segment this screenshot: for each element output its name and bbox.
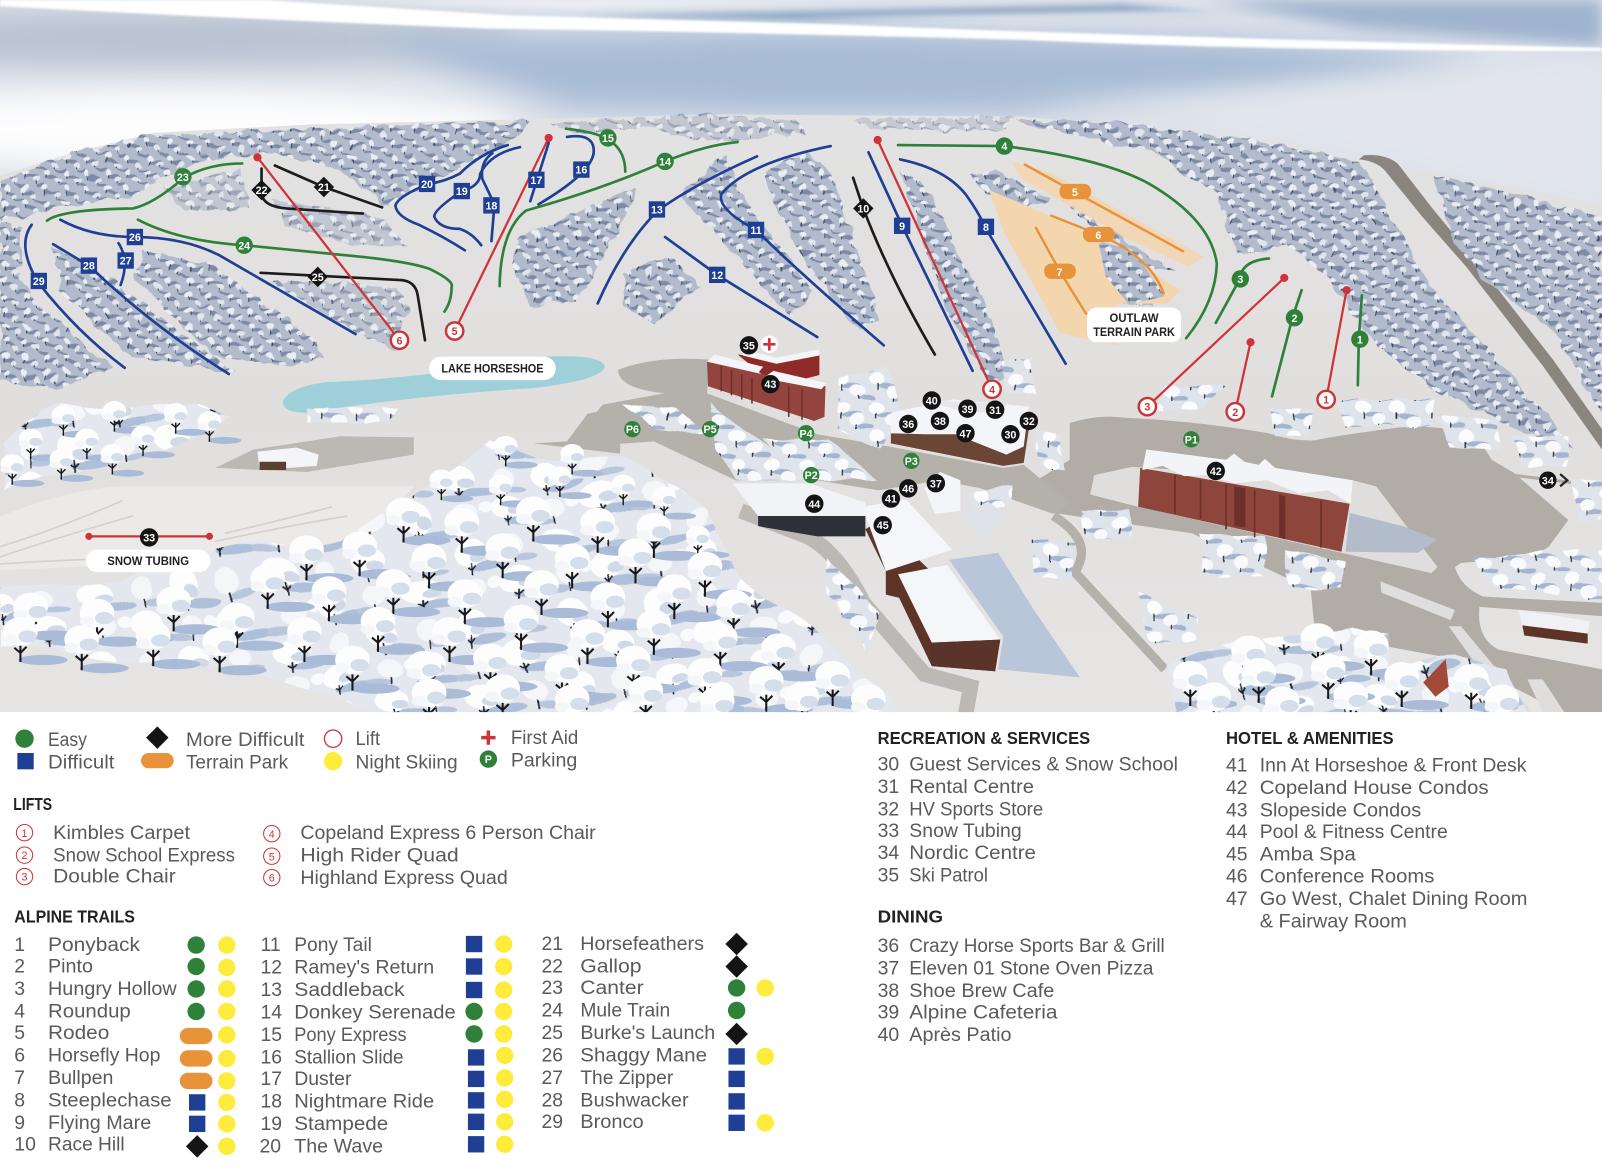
trails column 21 to 29: 22 xyxy=(541,956,563,978)
heading: lifts: LIFTS xyxy=(13,794,52,814)
trails column 21 to 29: 29 xyxy=(541,1111,563,1133)
panel: recreation and services xyxy=(878,728,1178,887)
facility markers: 35 xyxy=(743,340,755,352)
panel: difficulty key: Easy xyxy=(48,729,87,751)
building: Copeland House Condos xyxy=(1138,450,1353,552)
panel: difficulty key: First Aid xyxy=(511,727,578,749)
terrain trail 5 Rodeo: 5 xyxy=(1072,187,1078,199)
trail 27 The Zipper xyxy=(117,243,134,285)
trail 8 Steeplechase xyxy=(900,159,1066,364)
trail 21 Horsefeathers xyxy=(275,166,382,207)
trails column 21 to 29: 23 xyxy=(541,977,563,999)
trail 17 Duster xyxy=(528,143,549,201)
trail 14 Donkey Serenade: 14 xyxy=(659,157,671,169)
trails column 11 to 20: 11 xyxy=(261,934,281,956)
trails column 21 to 29: 26 xyxy=(541,1045,563,1067)
parking markers: P2 xyxy=(805,470,818,482)
trails column 1 to 10 xyxy=(14,934,235,1158)
trails column 21 to 29: 28 xyxy=(541,1089,563,1111)
parking markers: P1 xyxy=(1185,434,1198,446)
parking markers xyxy=(624,421,1199,483)
panel: hotel and amenities: & Fairway Room xyxy=(1260,911,1407,933)
facility markers: 41 xyxy=(885,494,897,506)
panel: lifts list: 1 xyxy=(22,828,28,840)
panel: lifts list: Highland Express Quad xyxy=(300,867,508,889)
lift 5 High Rider Quad xyxy=(446,134,553,340)
lift 4 Copeland Express xyxy=(874,136,1001,398)
label: Outlaw Terrain Park xyxy=(1087,308,1181,342)
trails column 11 to 20: 19 xyxy=(261,1113,282,1135)
panel: difficulty key: Lift xyxy=(356,728,381,750)
trails column 1 to 10: 5 xyxy=(14,1022,25,1044)
panel: lifts list: High Rider Quad xyxy=(300,844,459,866)
trail 9 Flying Mare: 9 xyxy=(899,221,905,233)
trail 17 Duster: 17 xyxy=(530,175,542,187)
trail 16 Stallion Slide xyxy=(538,136,594,204)
trails column 1 to 10: Pinto xyxy=(48,956,93,978)
lift 3 Double Chair: 3 xyxy=(1144,402,1150,414)
panel: dining: 37 xyxy=(878,958,899,980)
trail 13 Saddleback xyxy=(598,156,757,303)
trails column 21 to 29: Shaggy Mane xyxy=(580,1045,707,1067)
trails column 11 to 20: Pony Tail xyxy=(294,934,372,956)
facility markers: 31 xyxy=(989,405,1001,417)
trails column 1 to 10: Ponyback xyxy=(48,934,140,956)
trails column 1 to 10: 1 xyxy=(14,934,25,956)
panel: recreation and services: 35 xyxy=(878,865,899,887)
snow tubing marker and label: 33 xyxy=(143,532,155,544)
panel: lifts list: Snow School Express xyxy=(53,844,235,866)
panel: difficulty key: Parking xyxy=(511,749,577,771)
panel: dining: Shoe Brew Cafe xyxy=(909,980,1054,1002)
panel: lifts list: 2 xyxy=(22,850,28,862)
trail 28 Bushwacker: 28 xyxy=(83,261,95,273)
trail 10 Race Hill: 10 xyxy=(857,204,869,216)
individual snow trees in the forest xyxy=(0,401,1549,735)
panel: difficulty key xyxy=(15,726,578,773)
lift 2 Snow School Express xyxy=(1227,338,1255,420)
trail 24 Mule Train xyxy=(138,220,452,312)
terrain trail 5 Rodeo xyxy=(1025,164,1183,251)
panel: hotel and amenities: Go West, Chalet Dining Room xyxy=(1260,888,1527,910)
trail 13 Saddleback: 13 xyxy=(651,205,663,217)
building: small grey shed xyxy=(960,502,1008,541)
lift 2 Snow School Express: 2 xyxy=(1232,407,1238,419)
trails column 11 to 20: 15 xyxy=(261,1024,282,1046)
trail 3 Hungry Hollow xyxy=(1216,258,1269,323)
trails column 1 to 10: Horsefly Hop xyxy=(48,1045,160,1067)
nordic centre marker with arrow: 34 xyxy=(1542,475,1554,487)
trail 15 Pony Express xyxy=(566,129,625,172)
trails column 21 to 29: Bronco xyxy=(580,1111,644,1133)
panel: recreation and services: 34 xyxy=(878,842,899,864)
trail 19 Stampede xyxy=(434,147,520,245)
trails column 21 to 29: 25 xyxy=(541,1022,563,1044)
building: Copeland House shadow xyxy=(1346,513,1438,553)
snow tubing marker and label xyxy=(85,528,213,572)
panel: recreation and services: 33 xyxy=(878,820,899,842)
panel: recreation and services: Nordic Centre xyxy=(909,842,1036,864)
panel: dining: Après Patio xyxy=(909,1024,1011,1046)
trail 11 Pony Tail xyxy=(721,146,884,345)
facility markers: 37 xyxy=(930,478,942,490)
label: Outlaw Terrain Park: TERRAIN PARK xyxy=(1093,326,1175,339)
panel: recreation and services: 30 xyxy=(878,753,899,775)
trail 12 Ramey's Return xyxy=(665,237,817,337)
trees inside terrain park xyxy=(1098,241,1165,304)
trails column 11 to 20: 18 xyxy=(261,1091,282,1113)
trail 19 Stampede: 19 xyxy=(456,186,468,198)
label: Outlaw Terrain Park: OUTLAW xyxy=(1110,312,1159,325)
facility markers: 40 xyxy=(926,396,938,408)
trail 9 Flying Mare xyxy=(868,152,973,371)
buildings xyxy=(707,349,1590,697)
panel: dining: 38 xyxy=(878,980,899,1002)
panel: dining xyxy=(878,907,1165,1046)
panel: hotel and amenities: 41 xyxy=(1226,754,1248,776)
panel: difficulty key: Terrain Park xyxy=(186,751,288,773)
trails column 1 to 10: Rodeo xyxy=(48,1022,109,1044)
trail 20 The Wave: 20 xyxy=(421,179,433,191)
trail 29 Bronco: 29 xyxy=(33,276,45,288)
trail 15 Pony Express: 15 xyxy=(602,133,614,145)
snow ground xyxy=(0,114,1602,712)
panel: lifts list: Double Chair xyxy=(53,866,176,888)
sky with clouds xyxy=(0,0,1602,245)
panel: lifts list: 4 xyxy=(269,829,275,841)
west road and small cabin xyxy=(216,407,620,472)
trails column 21 to 29: Horsefeathers xyxy=(580,933,704,955)
panel: recreation and services: HV Sports Store xyxy=(909,798,1043,820)
panel: dining: 39 xyxy=(878,1002,899,1024)
heading: hotel and amenities: HOTEL & AMENITIES xyxy=(1226,728,1394,748)
panel: hotel and amenities: 43 xyxy=(1226,799,1248,821)
trail 18 Nightmare Ride xyxy=(482,153,500,241)
trails column 11 to 20: 17 xyxy=(261,1068,282,1090)
trails column 11 to 20: The Wave xyxy=(294,1135,383,1157)
trails column 1 to 10: 8 xyxy=(14,1089,25,1111)
building: Slopeside Condos xyxy=(707,349,827,421)
right parking and road surfaces xyxy=(1037,155,1602,712)
trails column 1 to 10: 9 xyxy=(14,1112,25,1134)
trails column 11 to 20: 16 xyxy=(261,1047,282,1069)
panel: lifts list: 5 xyxy=(269,851,275,863)
trail 23 Canter xyxy=(47,163,242,221)
trail 25 Burke's Launch: 25 xyxy=(312,272,324,284)
trails column 21 to 29: Mule Train xyxy=(580,1000,670,1022)
building: pool and fitness xyxy=(733,483,865,536)
trail 26 Shaggy Mane: 26 xyxy=(129,232,141,244)
trail 4 Roundup xyxy=(898,137,1217,338)
tree clusters: lower forest base xyxy=(0,403,1533,741)
panel: hotel and amenities: Slopeside Condos xyxy=(1260,799,1421,821)
building: central lodge xyxy=(891,399,1029,466)
heading: dining: DINING xyxy=(878,907,943,927)
panel: dining: Crazy Horse Sports Bar & Grill xyxy=(909,935,1165,957)
trail 11 Pony Tail: 11 xyxy=(750,225,762,237)
trails column 1 to 10: Hungry Hollow xyxy=(48,978,178,1000)
building: south-east cabin xyxy=(1518,610,1590,644)
facility markers: 36 xyxy=(902,419,914,431)
facility markers: 43 xyxy=(764,379,776,391)
panel: lifts list: 6 xyxy=(269,873,275,885)
lift 4 Copeland Express: 4 xyxy=(989,384,995,396)
panel: recreation and services: Guest Services & Snow School xyxy=(909,753,1178,775)
lift 6 Highland Express Quad: 6 xyxy=(396,335,402,347)
trails column 11 to 20: Donkey Serenade xyxy=(294,1002,456,1024)
panel: lifts list: Copeland Express 6 Person Chair xyxy=(300,822,596,844)
trail 18 Nightmare Ride: 18 xyxy=(485,200,497,212)
trails column 1 to 10: Steeplechase xyxy=(48,1089,172,1111)
nordic centre marker with arrow xyxy=(1539,472,1567,489)
panel: recreation and services: 32 xyxy=(878,798,899,820)
trail 22 Gallop: 22 xyxy=(256,185,268,197)
facility markers: 30 xyxy=(1004,429,1016,441)
trails column 11 to 20: 12 xyxy=(261,957,282,979)
white legend background xyxy=(0,712,1602,1170)
facility markers: 39 xyxy=(962,404,974,416)
trail 24 Mule Train: 24 xyxy=(238,240,250,252)
facility markers: 42 xyxy=(1210,466,1222,478)
building: east lodge block xyxy=(925,472,960,514)
lift 3 Double Chair xyxy=(1139,274,1288,415)
panel: hotel and amenities: Pool & Fitness Centre xyxy=(1260,821,1448,843)
facility markers xyxy=(740,336,1225,534)
central road and parking xyxy=(567,359,1165,715)
trails column 11 to 20: Saddleback xyxy=(294,979,405,1001)
parking markers: P5 xyxy=(704,424,717,436)
trail 23 Canter: 23 xyxy=(177,172,189,184)
trails column 11 to 20: 14 xyxy=(261,1002,282,1024)
trails column 11 to 20: Pony Express xyxy=(294,1024,407,1046)
panel: dining: Alpine Cafeteria xyxy=(909,1002,1058,1024)
trails column 21 to 29: Bushwacker xyxy=(580,1089,689,1111)
panel: difficulty key: More Difficult xyxy=(186,729,305,751)
trails column 1 to 10: 6 xyxy=(14,1045,25,1067)
panel: recreation and services: Snow Tubing xyxy=(909,820,1022,842)
panel: hotel and amenities xyxy=(1226,728,1527,933)
panel: hotel and amenities: 42 xyxy=(1226,777,1248,799)
facility markers: 44 xyxy=(808,499,820,511)
lake xyxy=(283,356,605,413)
parking markers: P3 xyxy=(905,456,918,468)
trails column 11 to 20: Stallion Slide xyxy=(294,1047,404,1069)
panel: hotel and amenities: 47 xyxy=(1226,888,1248,910)
trails column 21 to 29: Gallop xyxy=(580,956,642,978)
trail 14 Donkey Serenade xyxy=(500,142,738,286)
trails column 21 to 29: 21 xyxy=(541,933,563,955)
heading: alpine trails: ALPINE TRAILS xyxy=(14,907,135,927)
panel: difficulty key: Difficult xyxy=(48,751,115,773)
building: hotel wing with Amba Spa xyxy=(862,500,1000,671)
trail 29 Bronco xyxy=(25,225,125,368)
trail 12 Ramey's Return: 12 xyxy=(711,270,723,282)
trails column 1 to 10: 3 xyxy=(14,978,25,1000)
panel: hotel and amenities: Copeland House Condos xyxy=(1260,777,1489,799)
trails column 1 to 10: Race Hill xyxy=(48,1133,125,1155)
trail 2 Pinto: 2 xyxy=(1291,313,1297,325)
trails column 21 to 29: Burke's Launch xyxy=(580,1022,715,1044)
trails column 11 to 20: 13 xyxy=(261,979,282,1001)
trail 28 Bushwacker xyxy=(53,244,229,374)
lift 6 Highland Express Quad xyxy=(253,153,408,349)
facility markers: 47 xyxy=(960,428,971,440)
trails column 11 to 20: Ramey's Return xyxy=(294,957,434,979)
tree clusters: base area xyxy=(307,358,1602,654)
panel: lifts list xyxy=(13,794,596,889)
trail 10 Race Hill xyxy=(853,178,935,355)
facility markers: 45 xyxy=(877,520,889,532)
trails column 1 to 10: 10 xyxy=(14,1133,36,1155)
terrain trail 7 Bullpen: 7 xyxy=(1057,267,1063,279)
trail 1 Ponyback: 1 xyxy=(1357,334,1363,346)
trails column 1 to 10: 4 xyxy=(14,1001,25,1023)
trails column 11 to 20: 20 xyxy=(260,1135,281,1157)
terrain trail 6 Horsefly Hop: 6 xyxy=(1095,230,1101,242)
trails column 21 to 29: Canter xyxy=(580,977,644,999)
panel: recreation and services: 31 xyxy=(878,776,899,798)
trails column 1 to 10: 7 xyxy=(14,1067,25,1089)
building: chapel xyxy=(1423,659,1449,697)
terrain park zones xyxy=(989,161,1204,345)
panel: difficulty key: P xyxy=(485,754,492,766)
terrain trail 6 Horsefly Hop xyxy=(1051,216,1164,293)
trail 2 Pinto xyxy=(1272,290,1303,396)
trail 26 Shaggy Mane xyxy=(60,220,356,334)
panel: hotel and amenities: 44 xyxy=(1226,821,1248,843)
label: Lake Horseshoe: LAKE HORSESHOE xyxy=(441,362,544,375)
snow tubing hill xyxy=(0,486,415,570)
panel: trail map illustration xyxy=(0,0,1602,741)
panel: hotel and amenities: Amba Spa xyxy=(1260,843,1356,865)
trail 22 Gallop xyxy=(251,169,363,214)
panel: dining: 36 xyxy=(878,935,899,957)
lift 5 High Rider Quad: 5 xyxy=(452,326,458,338)
trails column 21 to 29: 24 xyxy=(541,1000,563,1022)
trails column 1 to 10: Bullpen xyxy=(48,1067,113,1089)
lift 1 Kimbles Carpet: 1 xyxy=(1323,395,1329,407)
parking markers: P4 xyxy=(800,428,813,440)
facility markers: 32 xyxy=(1023,416,1035,428)
trails column 11 to 20: Nightmare Ride xyxy=(294,1091,434,1113)
trail 3 Hungry Hollow: 3 xyxy=(1237,274,1243,286)
panel: difficulty key: Night Skiing xyxy=(356,751,458,773)
trails column 11 to 20: Stampede xyxy=(294,1113,388,1135)
panel: recreation and services: Rental Centre xyxy=(909,776,1034,798)
panel: alpine trails list xyxy=(14,907,774,1158)
trail 8 Steeplechase: 8 xyxy=(983,222,989,234)
panel: dining: Eleven 01 Stone Oven Pizza xyxy=(909,958,1154,980)
snow tubing marker and label: SNOW TUBING xyxy=(107,555,189,568)
panel: lifts list: Kimbles Carpet xyxy=(53,822,191,844)
panel: hotel and amenities: 46 xyxy=(1226,866,1248,888)
tree clusters: upper slopes xyxy=(0,114,1602,450)
trails column 11 to 20: Duster xyxy=(294,1068,352,1090)
trail 1 Ponyback xyxy=(1351,295,1369,385)
trail 25 Burke's Launch xyxy=(261,267,425,340)
trail 21 Horsefeathers: 21 xyxy=(318,182,330,194)
trail 4 Roundup: 4 xyxy=(1001,141,1007,153)
building: long shadow lower hotel xyxy=(949,553,1080,677)
parking markers: P6 xyxy=(626,424,639,436)
trails column 11 to 20 xyxy=(260,934,513,1157)
trails column 21 to 29: 27 xyxy=(541,1067,563,1089)
panel: hotel and amenities: Conference Rooms xyxy=(1260,866,1434,888)
trails column 21 to 29: The Zipper xyxy=(580,1067,674,1089)
panel: hotel and amenities: 45 xyxy=(1226,843,1248,865)
panel: recreation and services: Ski Patrol xyxy=(909,865,988,887)
trails column 1 to 10: Roundup xyxy=(48,1001,131,1023)
trails column 21 to 29 xyxy=(541,933,774,1133)
lift 1 Kimbles Carpet xyxy=(1317,286,1351,408)
panel: dining: 40 xyxy=(878,1024,899,1046)
heading: recreation and services: RECREATION & SERVICES xyxy=(878,728,1090,748)
terrain trail 7 Bullpen xyxy=(1036,228,1086,314)
trails column 1 to 10: 2 xyxy=(14,956,25,978)
trails column 1 to 10: Flying Mare xyxy=(48,1112,151,1134)
trail 20 The Wave xyxy=(395,145,508,250)
panel: lifts list: 3 xyxy=(22,872,28,884)
facility markers: 46 xyxy=(902,483,914,495)
trail 16 Stallion Slide: 16 xyxy=(575,165,587,177)
facility markers: 38 xyxy=(934,416,946,428)
panel: hotel and amenities: Inn At Horseshoe & Front Desk xyxy=(1260,754,1527,776)
label: Lake Horseshoe xyxy=(429,357,556,380)
trail 27 The Zipper: 27 xyxy=(120,256,132,268)
